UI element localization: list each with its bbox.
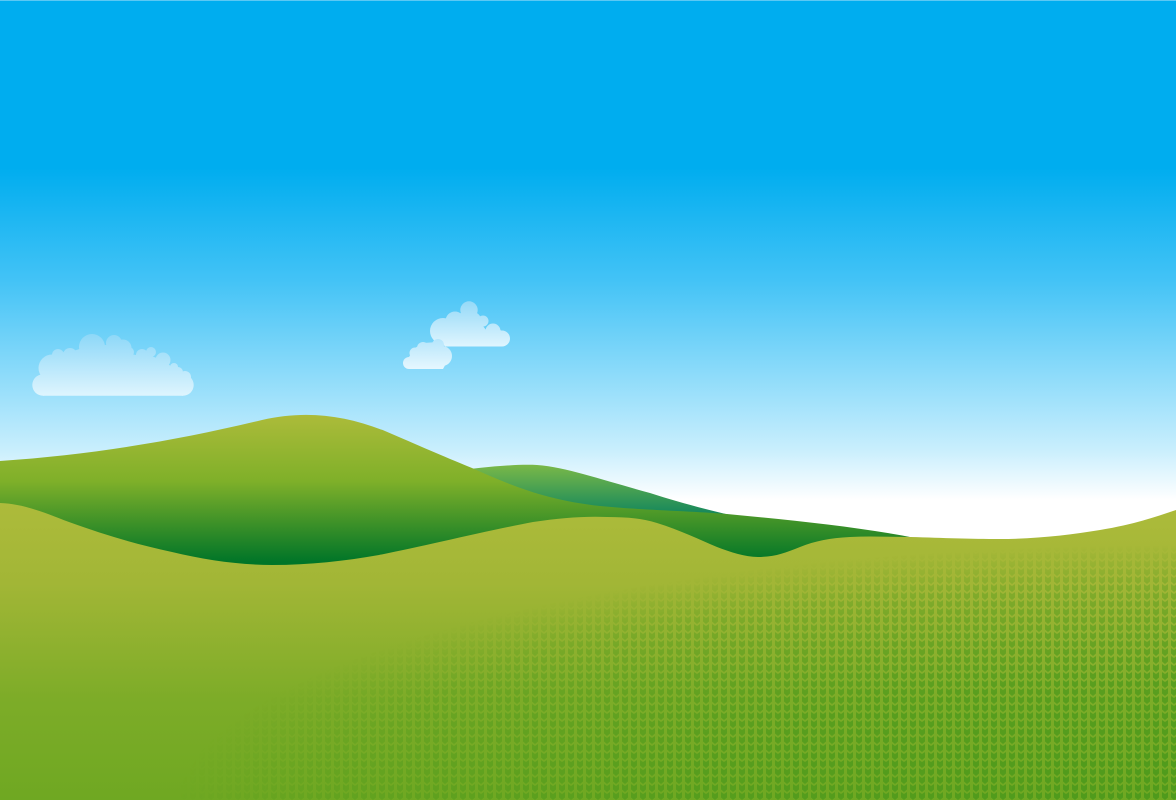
cloud: upper centre [430,301,510,346]
hill: middle green [0,415,915,600]
cloud: lower centre [403,339,452,369]
hill: distant teal [450,465,730,530]
hill: foreground meadow [0,503,1176,800]
cloud: large left [32,334,194,396]
top edge highlight [0,0,1176,1]
grass texture [274,556,1176,800]
